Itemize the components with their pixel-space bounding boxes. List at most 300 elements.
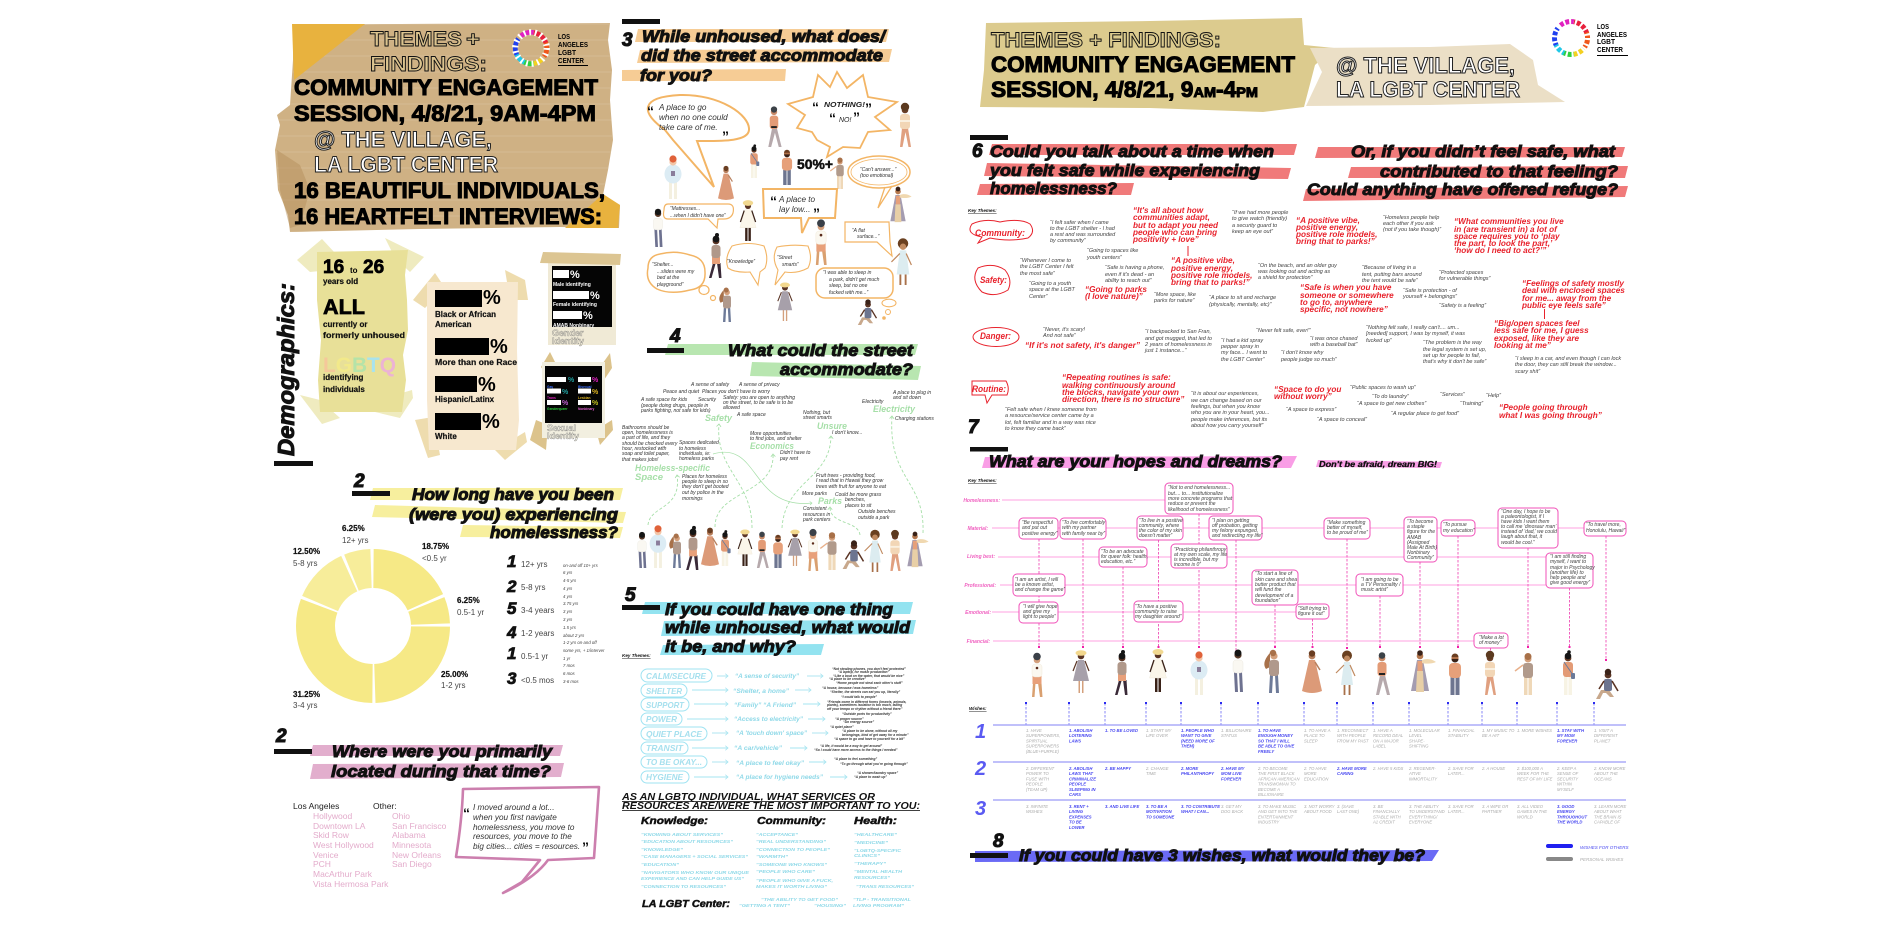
bubble: able to sleep in a park [816, 268, 896, 320]
responses text: Could be more grass [835, 492, 882, 498]
heading: at the village: @ THE VILLAGE, [314, 127, 492, 152]
responses text: I don't know... [832, 430, 862, 436]
quotes: gray responses: “Public spaces to wash up” [1350, 385, 1417, 391]
chart labels: 12.50% [293, 547, 320, 556]
dream quotes text: doesn't matter” [1139, 533, 1173, 539]
section: services and resources [621, 792, 920, 910]
quotes: gray responses: parks for nature” [1153, 298, 1196, 304]
row: LA LGBT Center: LIVING PROGRAM” [853, 903, 905, 908]
responses text: Didn't have to [780, 450, 811, 456]
tally list of durations: 1 [507, 552, 516, 571]
panel: sexual identity polaroid: % [592, 389, 599, 396]
theme lines and labels: Financial: [967, 639, 990, 645]
bubble: nothing: “ [812, 99, 819, 115]
tally list of durations: 5-8 yrs [521, 583, 545, 592]
location lists: Skid Row [313, 830, 350, 840]
dream quotes text: “To pursue [1443, 522, 1467, 528]
heading: could you talk about a time: you felt safe while experiencing [989, 161, 1261, 180]
heading: sixteen interviews: 16 BEAUTIFUL INDIVIDUALS, [294, 178, 605, 203]
chart labels: 12+ yrs [342, 536, 368, 545]
panel: sexual identity polaroid: Lesbian [578, 396, 590, 400]
tally list of durations: 1-2 years [521, 629, 554, 638]
quotes: gray responses: people make inferences, but its [1190, 417, 1267, 423]
responses text: A safe space [736, 412, 766, 418]
panel: race and ethnicity note: % [482, 411, 500, 433]
heading: what could the street: accommodate? [780, 360, 914, 379]
quotes: red highlights: what I was going through” [1499, 411, 1603, 420]
quotes: gray responses: the tent would be safe” [1362, 278, 1419, 284]
wish columns: SLEEP [1304, 738, 1318, 743]
bubble: a place to go: take care of me. [659, 123, 718, 132]
tally list of durations: 4 yrs [563, 594, 573, 599]
tiny supporting quotes: “A house, because I was homeless” [822, 686, 879, 690]
theme pills: POWER [646, 714, 678, 724]
bubble: routine: Routine: [972, 384, 1006, 394]
quotes: gray responses: “A regular place to get food” [1391, 411, 1460, 417]
panel: age and identity note: 16 [323, 257, 344, 278]
bubble: a flat surface: surface...” [857, 234, 880, 240]
dream quote boxes [1013, 483, 1626, 648]
chart labels [293, 524, 484, 710]
quotes: gray responses: “A space to get new clothes” [1357, 401, 1427, 407]
wish columns: 3. ALL VIDEO [1517, 804, 1544, 809]
bubble: street smarts: “Street [777, 255, 793, 261]
panel: sexual identity polaroid: % [592, 377, 599, 384]
quotes: red highlights: bring that to parks!” [1296, 237, 1376, 246]
location lists: MacArthur Park [313, 869, 373, 879]
quotes: gray responses: tent, putting bars around [1362, 272, 1423, 278]
wish columns: 1. FINANCIAL [1448, 728, 1475, 733]
responses text: Peace and quiet [663, 389, 700, 395]
quotes: red highlights: “A positive vibe, [1171, 256, 1235, 265]
wish columns: (BLUE+PURPLE) [1026, 749, 1060, 754]
quotes: red highlights: “Repeating routines is safe: [1062, 373, 1171, 382]
panel: race and ethnicity note: % [483, 287, 501, 309]
quotes: gray responses: pepper spray in [1220, 344, 1259, 350]
callout: moved around quote: homelessness, you move to [473, 823, 575, 832]
heading: what could the street: 4 [669, 326, 681, 347]
responses text: pay rent [779, 456, 799, 462]
quotes: gray responses: scary shit” [1515, 369, 1541, 375]
heading: if you didn't feel safe: contributed to that feeling? [1380, 162, 1619, 181]
row: LA LGBT Center: “HOUSING” [814, 903, 847, 908]
dream quotes text: butter product that [1255, 582, 1296, 588]
panel: gender identity polaroid: % [570, 269, 580, 281]
location lists: Alabama [392, 830, 426, 840]
quotes: gray responses: with a baseball bat” [1310, 342, 1359, 348]
wish columns: BE ABLE TO GIVE [1258, 744, 1295, 749]
quotes: red highlights: “Feelings of safety mostly [1522, 279, 1624, 288]
quotes: gray responses: was looking out and acting as [1258, 269, 1330, 275]
icon: LA LGBT Center logo: LGBT [1597, 37, 1615, 46]
heading: where were you located [274, 726, 564, 781]
responses text: outside a park [858, 515, 890, 521]
callout: moved around quote: ” [582, 839, 589, 855]
wish columns: 1. PEOPLE WHO [1181, 728, 1215, 733]
quotes: gray responses: to the LGBT shelter - I had [1050, 226, 1116, 232]
column: knowledge: “KNOWING ABOUT SERVICES” [641, 832, 724, 837]
icon: LA LGBT Center logo: CENTER [558, 56, 584, 65]
quotes: gray responses: and got mugged, that led to [1145, 336, 1212, 342]
column: community [756, 815, 833, 889]
column: knowledge: “CONNECTION TO RESOURCES” [641, 884, 727, 889]
responses text: resources in [803, 512, 830, 518]
dream quotes text: “To live comfortably [1062, 520, 1106, 526]
theme quotes: “Shelter, a home” [733, 688, 790, 695]
responses text: places to sit [844, 503, 872, 509]
arrows from themes to quotes [687, 676, 847, 777]
heading: if you could have 3 wishes: If you could have 3 wishes, what would they be? [1019, 846, 1426, 865]
quotes: red highlights: (I love nature)” [1085, 292, 1144, 301]
speech bubbles [647, 72, 910, 320]
heading: while unhoused: While unhoused, what does/ [642, 27, 887, 46]
panel: sexual identity polaroid: % [568, 377, 575, 384]
wish columns: STATUS [1221, 733, 1237, 738]
theme quotes: “A car/vehicle” [734, 745, 783, 752]
section: where located [274, 726, 599, 893]
bubble: nothing: “ [829, 110, 836, 126]
tally list of durations: 4 [506, 623, 517, 642]
wish columns [1025, 728, 1627, 830]
stat: fifty percent plus: 50%+ [797, 157, 833, 172]
dream quotes text: my education” [1443, 528, 1475, 534]
quotes: red highlights: “Safe is when you have [1300, 283, 1392, 292]
tally list of durations: 3 [507, 669, 517, 688]
icon: LA LGBT Center logo: LOS [558, 32, 570, 41]
dream quotes text: off probation, getting [1212, 523, 1258, 529]
bubble: able to sleep in a park: “I was able to sleep in [823, 270, 872, 276]
wish columns: 3. THE ABILITY [1409, 804, 1440, 809]
callout: moved around quote: resources, you move to the [473, 832, 572, 841]
heading: if you could have one thing: 5 [625, 585, 636, 606]
tiny supporting quotes: “An energy source” [843, 720, 874, 724]
wish columns: 1. VISIT A [1594, 728, 1613, 733]
legend: WISHES FOR OTHERS [1580, 845, 1629, 850]
wish columns: PARTNER [1482, 809, 1502, 814]
section: feeling safe [968, 135, 1628, 432]
quotes: gray responses: “I felt safer when I came [1050, 220, 1109, 226]
wish columns: THE WORLD [1557, 820, 1582, 825]
dream quotes text: (Assigned [1407, 540, 1429, 546]
quotes: gray responses: set up for people to fail, [1423, 353, 1480, 359]
location lists: San Francisco [392, 821, 447, 831]
heading: as an LGBTQ individual [621, 792, 920, 812]
quotes: red highlights: in (are transient in) a lot of [1454, 225, 1558, 234]
dream quotes text: “Be respectful [1022, 520, 1054, 526]
theme labels: Safety [705, 413, 733, 424]
dream quotes text: “I am going to be [1361, 577, 1399, 583]
dream quotes text: have kids I want them [1501, 519, 1549, 525]
wish columns: MOM LIVE [1221, 771, 1242, 776]
quotes: gray responses: “Help” [1486, 393, 1502, 399]
dream quotes text: figure it out” [1298, 611, 1325, 617]
quotes: red highlights: “If it's not safety, it's danger” [1025, 341, 1141, 350]
chart labels: 18.75% [422, 542, 449, 551]
wish columns: 3. BE [1373, 804, 1383, 809]
heading: community engagement session: COMMUNITY ENGAGEMENT [294, 75, 599, 100]
chart labels: 0.5-1 yr [457, 608, 484, 617]
quotes: gray responses: space at the LGBT [1029, 287, 1075, 293]
bubble: can't answer [848, 156, 910, 208]
heading: what are your hopes and dreams: What are your hopes and dreams? [989, 452, 1283, 471]
theme quotes: “A 'touch down' space” [736, 730, 808, 737]
row: LA LGBT Center: “THE ABILITY TO GET FOOD” [761, 897, 839, 902]
theme labels: Economics [750, 441, 794, 452]
quotes: red highlights: people who can bring [1132, 228, 1217, 237]
bubble: mattresses: ...when I didn't have one” [670, 213, 726, 219]
quotes: gray responses: “Services” [1440, 392, 1466, 398]
column: health: “HEALTHCARE” [854, 832, 898, 837]
dream quotes text: education, etc.” [1101, 559, 1136, 565]
tally list of durations: 1.5 yrs [563, 625, 577, 630]
dream quotes text: and put out [1022, 525, 1048, 531]
wish columns: 1. MOLECULAR [1409, 728, 1440, 733]
bubble: able to sleep in a park: sleep, but no one [829, 283, 868, 289]
quotes: red highlights: “Big/open spaces feel [1494, 319, 1580, 328]
wish columns: WHAT I CAN... [1181, 809, 1209, 814]
icon: LA LGBT Center logo: LGBT [558, 48, 576, 57]
quotes: gray responses: “More space, like [1154, 292, 1196, 298]
responses text: allowed [723, 405, 740, 411]
dream quotes text: community, where [1139, 523, 1179, 529]
heading: where were you located: 2 [275, 726, 287, 747]
heading: while unhoused: 3 [622, 30, 633, 51]
column: community: “SOMEONE WHO KNOWS” [756, 862, 828, 867]
heading: if you could have one thing: If you could have one thing [665, 600, 894, 619]
wish columns: 3. TO BE A [1146, 804, 1167, 809]
dashed connectors and wish rules: 3 [975, 798, 986, 820]
heading: if you didn't feel safe: Could anything have offered refuge? [1307, 180, 1619, 199]
tally list of durations: 1 [507, 644, 516, 663]
wish columns: TO UNDERSTAND [1409, 809, 1445, 814]
quotes: red highlights: looking at me” [1494, 341, 1552, 350]
tally list of durations: 5 [507, 599, 517, 618]
heading: themes and findings [370, 28, 487, 76]
heading: sixteen interviews [294, 178, 605, 229]
responses text: should be checked every [622, 441, 678, 447]
heading: could you talk about a time: 6 [972, 141, 983, 162]
wish columns: EVERYONE [1409, 820, 1432, 825]
quotes: gray responses: “Whenever I come to [1020, 258, 1071, 264]
dream quotes text: “Still trying to [1298, 606, 1327, 612]
bubble: a place to lay low [763, 189, 837, 233]
wish columns: 2. ABOLISH [1068, 766, 1093, 771]
wish columns: SHIFTING [1409, 744, 1429, 749]
wish columns: REST OF MY LIFE [1517, 776, 1553, 781]
dream quotes text: the color of my skin [1139, 528, 1182, 534]
column: community: “ACCEPTANCE” [756, 832, 799, 837]
quotes: gray responses: the most safe” [1020, 271, 1056, 277]
quotes: gray responses: lot, felt familiar and in a way was nice [1005, 420, 1096, 426]
dream quotes text: major in Psychology [1550, 565, 1595, 571]
wish columns: TO SOMEONE [1146, 814, 1175, 819]
row: LA LGBT Center [642, 897, 911, 910]
panel: gender identity polaroid: Female identifying [553, 302, 597, 308]
bubble: danger [973, 328, 1019, 346]
heading: sixteen interviews: 16 HEARTFELT INTERVIEWS: [294, 204, 602, 229]
theme lines and labels: Living best: [967, 554, 995, 560]
responses text: Consistent [803, 506, 827, 512]
quotes: gray responses: a security guard to [1232, 223, 1277, 229]
dream quotes text: of money” [1479, 640, 1502, 646]
heading: if you could have one thing [622, 585, 916, 656]
tally list of durations: on-and off 10+ yrs [563, 563, 599, 568]
panel: sexual identity polaroid: Genderqueer [547, 407, 568, 411]
location lists: PCH [313, 859, 331, 869]
tally list of durations: some yrs, + 1/interver [563, 648, 605, 653]
tiny supporting quotes: “A shower/laundry space” [857, 771, 898, 775]
wish columns: (TEAM UP) [1026, 787, 1048, 792]
bubble: safety: Safety: [980, 275, 1007, 285]
wish columns: THE FIRST BLACK [1258, 771, 1295, 776]
quotes: red highlights: deal with enclosed spaces [1522, 286, 1625, 295]
responses text: Electricity [862, 399, 884, 405]
panel: sexual identity polaroid: Identity [547, 431, 579, 441]
column: knowledge [641, 815, 750, 889]
dream quotes text: “I plan on getting [1212, 518, 1249, 524]
responses text: individuals, ie: [679, 451, 711, 457]
heading: demographics [273, 283, 313, 466]
quotes: red highlights: exposed, like they are [1494, 334, 1580, 343]
quotes: gray responses: “I don't know why [1281, 350, 1325, 356]
dashed connectors from dreams to people [1038, 514, 1607, 661]
heading: where were you located: located during that time? [331, 762, 552, 781]
heading: could you talk about a time [970, 135, 1297, 198]
chart labels: 6.25% [457, 596, 480, 605]
heading: at the village [314, 127, 498, 177]
column: health: CLINICS” [854, 853, 881, 858]
wish columns: DIFFERENT [1594, 733, 1618, 738]
theme pills: SUPPORT [646, 700, 685, 710]
icon: LA LGBT Center logo [509, 26, 588, 70]
wish columns: 1. BILLIONAIRE [1221, 728, 1252, 733]
theme pills [641, 669, 712, 783]
quotes: gray responses: “Homeless people help [1383, 215, 1439, 221]
tally list of durations: <0.5 mos [521, 676, 554, 685]
bubble: a flat surface [845, 222, 892, 256]
heading: at the village: @ THE VILLAGE, [1336, 53, 1515, 78]
bubble: a place to lay low: ” [813, 205, 820, 221]
quotes: gray responses: fucked up” [1366, 338, 1393, 344]
dream quotes text: figure for the [1407, 529, 1435, 535]
quotes: gray responses: feelings, but when you know [1191, 404, 1261, 410]
theme pills: TO BE OKAY... [646, 757, 702, 767]
wish columns: 1. TO HAVE A [1304, 728, 1331, 733]
responses text: Bathrooms should be [622, 425, 669, 431]
dream quotes text: for queer folk: health, [1101, 554, 1148, 560]
column: health: “MENTAL HEALTH [854, 869, 903, 874]
wish columns: 2. TO HAVE [1303, 766, 1327, 771]
column: community: “REAL UNDERSTANDING” [756, 839, 827, 844]
dream quotes text: “To have a positive [1135, 604, 1177, 610]
legend: PERSONAL WISHES [1580, 857, 1623, 862]
theme quotes: “A sense of security” [735, 673, 800, 680]
quotes: gray responses: (physically, mentally, etc)” [1209, 302, 1273, 308]
column: health [854, 815, 915, 889]
wish columns: TRANSWOMAN TO [1258, 782, 1296, 787]
wish columns: SPIRITUAL [1026, 738, 1048, 743]
row of people [1032, 649, 1618, 699]
responses text: A place to plug in [892, 390, 931, 396]
wish columns: THE BRAIN IS [1594, 814, 1622, 819]
tally list of durations: 3 yrs [563, 609, 573, 614]
dream quotes text: “To travel more, [1586, 522, 1621, 528]
dream quotes text: a staple [1407, 524, 1425, 530]
quotes: red highlights: “A positive vibe, [1296, 216, 1360, 225]
dream quotes text: a paleontologist, if I [1501, 514, 1545, 520]
dream quotes text: to be proud of me” [1327, 530, 1368, 536]
panel: race and ethnicity note: Hispanic/Latinx [435, 395, 495, 404]
heading: how long have you been: homelessness? [490, 523, 619, 542]
tally list of durations: about 2 yrs [563, 633, 585, 638]
wish columns: PEOPLE [1026, 782, 1043, 787]
tally list of durations: 1 yr [563, 656, 571, 661]
dream quotes text: Nonbinary [1407, 550, 1430, 556]
section: what could the street accommodate [622, 326, 934, 572]
people illustrations [654, 103, 912, 325]
wish columns: WORLD [1517, 814, 1533, 819]
column: knowledge: “EDUCATION” [641, 862, 680, 867]
quotes: gray responses: (not if you take though)” [1383, 227, 1442, 233]
bubble: can't answer: “Can't answer...” [860, 167, 897, 173]
panel: race and ethnicity note: More than one Race [435, 358, 518, 367]
quotes: red highlights: walking continuously around [1062, 381, 1176, 390]
wish columns: 3. TO MAKE MUSIC [1258, 804, 1297, 809]
wish columns: BECOME A [1258, 787, 1280, 792]
heading: what are your hopes and dreams: Don't be afraid, dream BIG! [1319, 460, 1437, 469]
heading: community engagement session: SESSION, 4/8/21, 9AM-4PM [294, 101, 596, 126]
wish columns: 2. KNOW MORE [1593, 766, 1626, 771]
column: community: “WARMTH” [756, 854, 789, 859]
responses text: and sit down [893, 395, 921, 401]
quotes: red highlights: to go to, anywhere [1300, 298, 1373, 307]
dream quotes text: a TV Personality / [1361, 582, 1401, 588]
callout: moved around quote [456, 787, 599, 893]
panel: sexual identity polaroid: Sexual [547, 423, 576, 433]
donut chart: duration of homelessness [298, 551, 448, 701]
quotes: gray responses: “I sleep in a car, and even though I can lock [1515, 356, 1621, 362]
responses text: open, homelessness is [622, 430, 673, 436]
wish columns: FOREVER [1221, 776, 1241, 781]
chart labels: 3-4 yrs [293, 701, 317, 710]
tally list of durations: 12+ yrs [521, 560, 547, 569]
quotes: gray responses: “A space to conceal” [1317, 417, 1368, 423]
heading: themes and findings: FINDINGS: [370, 53, 487, 76]
dream quotes text: foundation” [1255, 598, 1280, 604]
wish columns: 3. TO CONTRIBUTE [1181, 804, 1220, 809]
wish columns: LATER... [1448, 771, 1465, 776]
theme quotes [733, 673, 824, 781]
panel: gender identity polaroid [540, 252, 621, 346]
responses text: hour, restocked with [622, 446, 667, 452]
responses text: they don't get booted [682, 484, 729, 490]
quotes: red highlights: “Going to parks [1085, 285, 1147, 294]
dream quotes text: music artist” [1361, 587, 1388, 593]
wish columns: LAST ONE) [1337, 809, 1360, 814]
wish columns: BE A HIT [1482, 733, 1500, 738]
responses text: Charging stations [895, 416, 934, 422]
responses text: (people doing drugs, people in [641, 403, 708, 409]
dream quotes text: is incredible, but my [1174, 557, 1219, 563]
bubble: can't answer: (too emotional) [860, 173, 894, 179]
quotes: red highlights: positive energy, [1295, 223, 1358, 232]
wish columns: 1. RECONNECT [1337, 728, 1369, 733]
wish columns: STABILITY [1448, 733, 1470, 738]
wish columns: 1. TO HAVE [1258, 728, 1281, 733]
heading: how long have you been [352, 471, 626, 542]
dream quotes text: AMAB [1406, 535, 1422, 541]
tiny supporting quotes: “A proper source” [835, 717, 864, 721]
